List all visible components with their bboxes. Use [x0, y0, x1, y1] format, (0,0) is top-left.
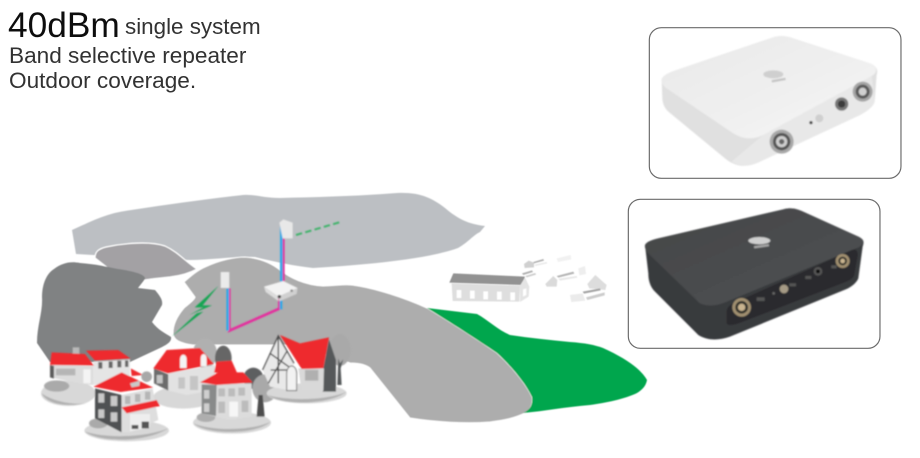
distant farm buildings [449, 255, 607, 302]
panel frame [628, 199, 880, 348]
house: tudor [263, 334, 351, 403]
panel: white repeater product [649, 28, 901, 178]
green coverage area [427, 308, 647, 413]
front hill [173, 257, 532, 423]
house: right-front two-storey [193, 361, 278, 434]
village houses [41, 334, 351, 441]
heading: 40dBm: 40dBm [8, 6, 120, 45]
panel: black repeater product [628, 199, 880, 348]
icon: repeater unit [264, 281, 298, 301]
text: band selective repeater: Band selective repeater [9, 43, 247, 68]
cable: pink link [229, 238, 283, 331]
barn [449, 273, 529, 302]
dashed wireless signal [296, 222, 342, 235]
panel frame [649, 28, 901, 178]
icon: lightning signal [172, 286, 218, 337]
icon: upper antenna [279, 219, 293, 238]
black device [645, 208, 864, 339]
landscape hills [37, 193, 647, 423]
icon: lower antenna [221, 272, 229, 288]
middle hill [95, 243, 197, 280]
repeater system [172, 219, 342, 337]
subheading: single system: single system [125, 14, 261, 39]
small distant buildings [522, 255, 607, 302]
left hill [37, 262, 171, 362]
white device [662, 36, 877, 166]
text: outdoor coverage: Outdoor coverage. [9, 68, 196, 93]
house: left pair [41, 347, 152, 406]
house: front three-storey [84, 372, 169, 441]
house: centre mansard [153, 338, 232, 409]
title block [8, 6, 261, 93]
cable: blue link [228, 223, 281, 331]
back hill [72, 193, 485, 268]
